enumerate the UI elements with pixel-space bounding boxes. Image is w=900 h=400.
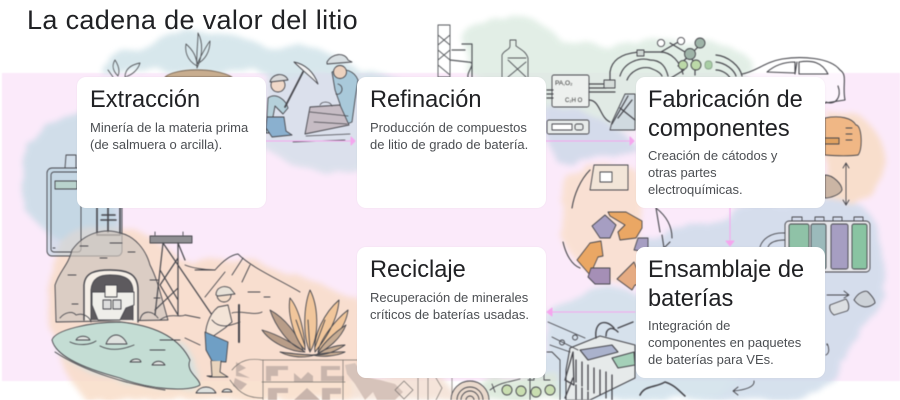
refinery towers (438, 25, 528, 77)
recycling symbol (563, 165, 672, 290)
card: Ensamblaje de baterías: Integración de (648, 318, 730, 333)
surveyor figure (205, 287, 262, 377)
card: Extracción (77, 77, 266, 208)
sun disc ornament (451, 378, 530, 400)
tablet device (47, 155, 122, 256)
orange component parts (825, 117, 861, 205)
workers with pickaxe (266, 55, 358, 142)
card: Fabricación de componentes (636, 77, 825, 208)
card: Ensamblaje de baterías: Ensamblaje de (648, 257, 804, 283)
mine hill and tunnel (55, 231, 200, 322)
card: Refinación: Producción de compuestos (370, 120, 527, 135)
lab machine and tubes (547, 50, 683, 122)
card: Fabricación de componentes: electroquímicas. (648, 182, 743, 197)
machine frame and reader (547, 94, 635, 134)
card: Extracción: (de salmuera o arcilla). (90, 137, 222, 152)
card: Refinación: Refinación (370, 87, 481, 113)
card: Extracción: Minería de la materia prima (90, 120, 248, 135)
agave (262, 290, 348, 357)
title: La cadena de valor del litio (27, 5, 358, 35)
flow arrows (266, 137, 734, 316)
ancient pattern strip (233, 362, 403, 400)
pink band (2, 73, 900, 381)
recovered pieces (733, 291, 875, 395)
pylon tower (150, 232, 212, 315)
molecule (657, 37, 742, 78)
card: Ensamblaje de baterías (636, 247, 825, 378)
battery module (565, 322, 685, 400)
card: Refinación: de litio de grado de batería. (370, 137, 528, 152)
circuit board bits (502, 322, 585, 400)
card: Reciclaje: Reciclaje (370, 257, 466, 283)
card: Fabricación de componentes: Fabricación de (648, 87, 803, 113)
card: Reciclaje (357, 247, 546, 378)
card: Ensamblaje de baterías: componentes en paquetes (648, 335, 801, 350)
plants (108, 33, 232, 77)
card: Fabricación de componentes: Creación de cátodos y (648, 148, 777, 163)
card: Ensamblaje de baterías: baterías (648, 286, 733, 312)
battery pack (760, 217, 870, 272)
card: Ensamblaje de baterías: de baterías para VEs. (648, 352, 774, 367)
card: Fabricación de componentes: otras partes (648, 165, 717, 180)
card: Extracción: Extracción (90, 87, 200, 113)
lab machine and tubes: C₂H O (565, 98, 583, 104)
card: Fabricación de componentes: componentes (648, 116, 790, 142)
mountains (185, 254, 300, 297)
card: Reciclaje: críticos de baterías usadas. (370, 307, 529, 322)
car (742, 58, 845, 103)
pond (52, 322, 232, 393)
lab machine and tubes: PA,O₂ (555, 80, 573, 87)
card: Reciclaje: Recuperación de minerales (370, 290, 528, 305)
card: Refinación (357, 77, 546, 208)
